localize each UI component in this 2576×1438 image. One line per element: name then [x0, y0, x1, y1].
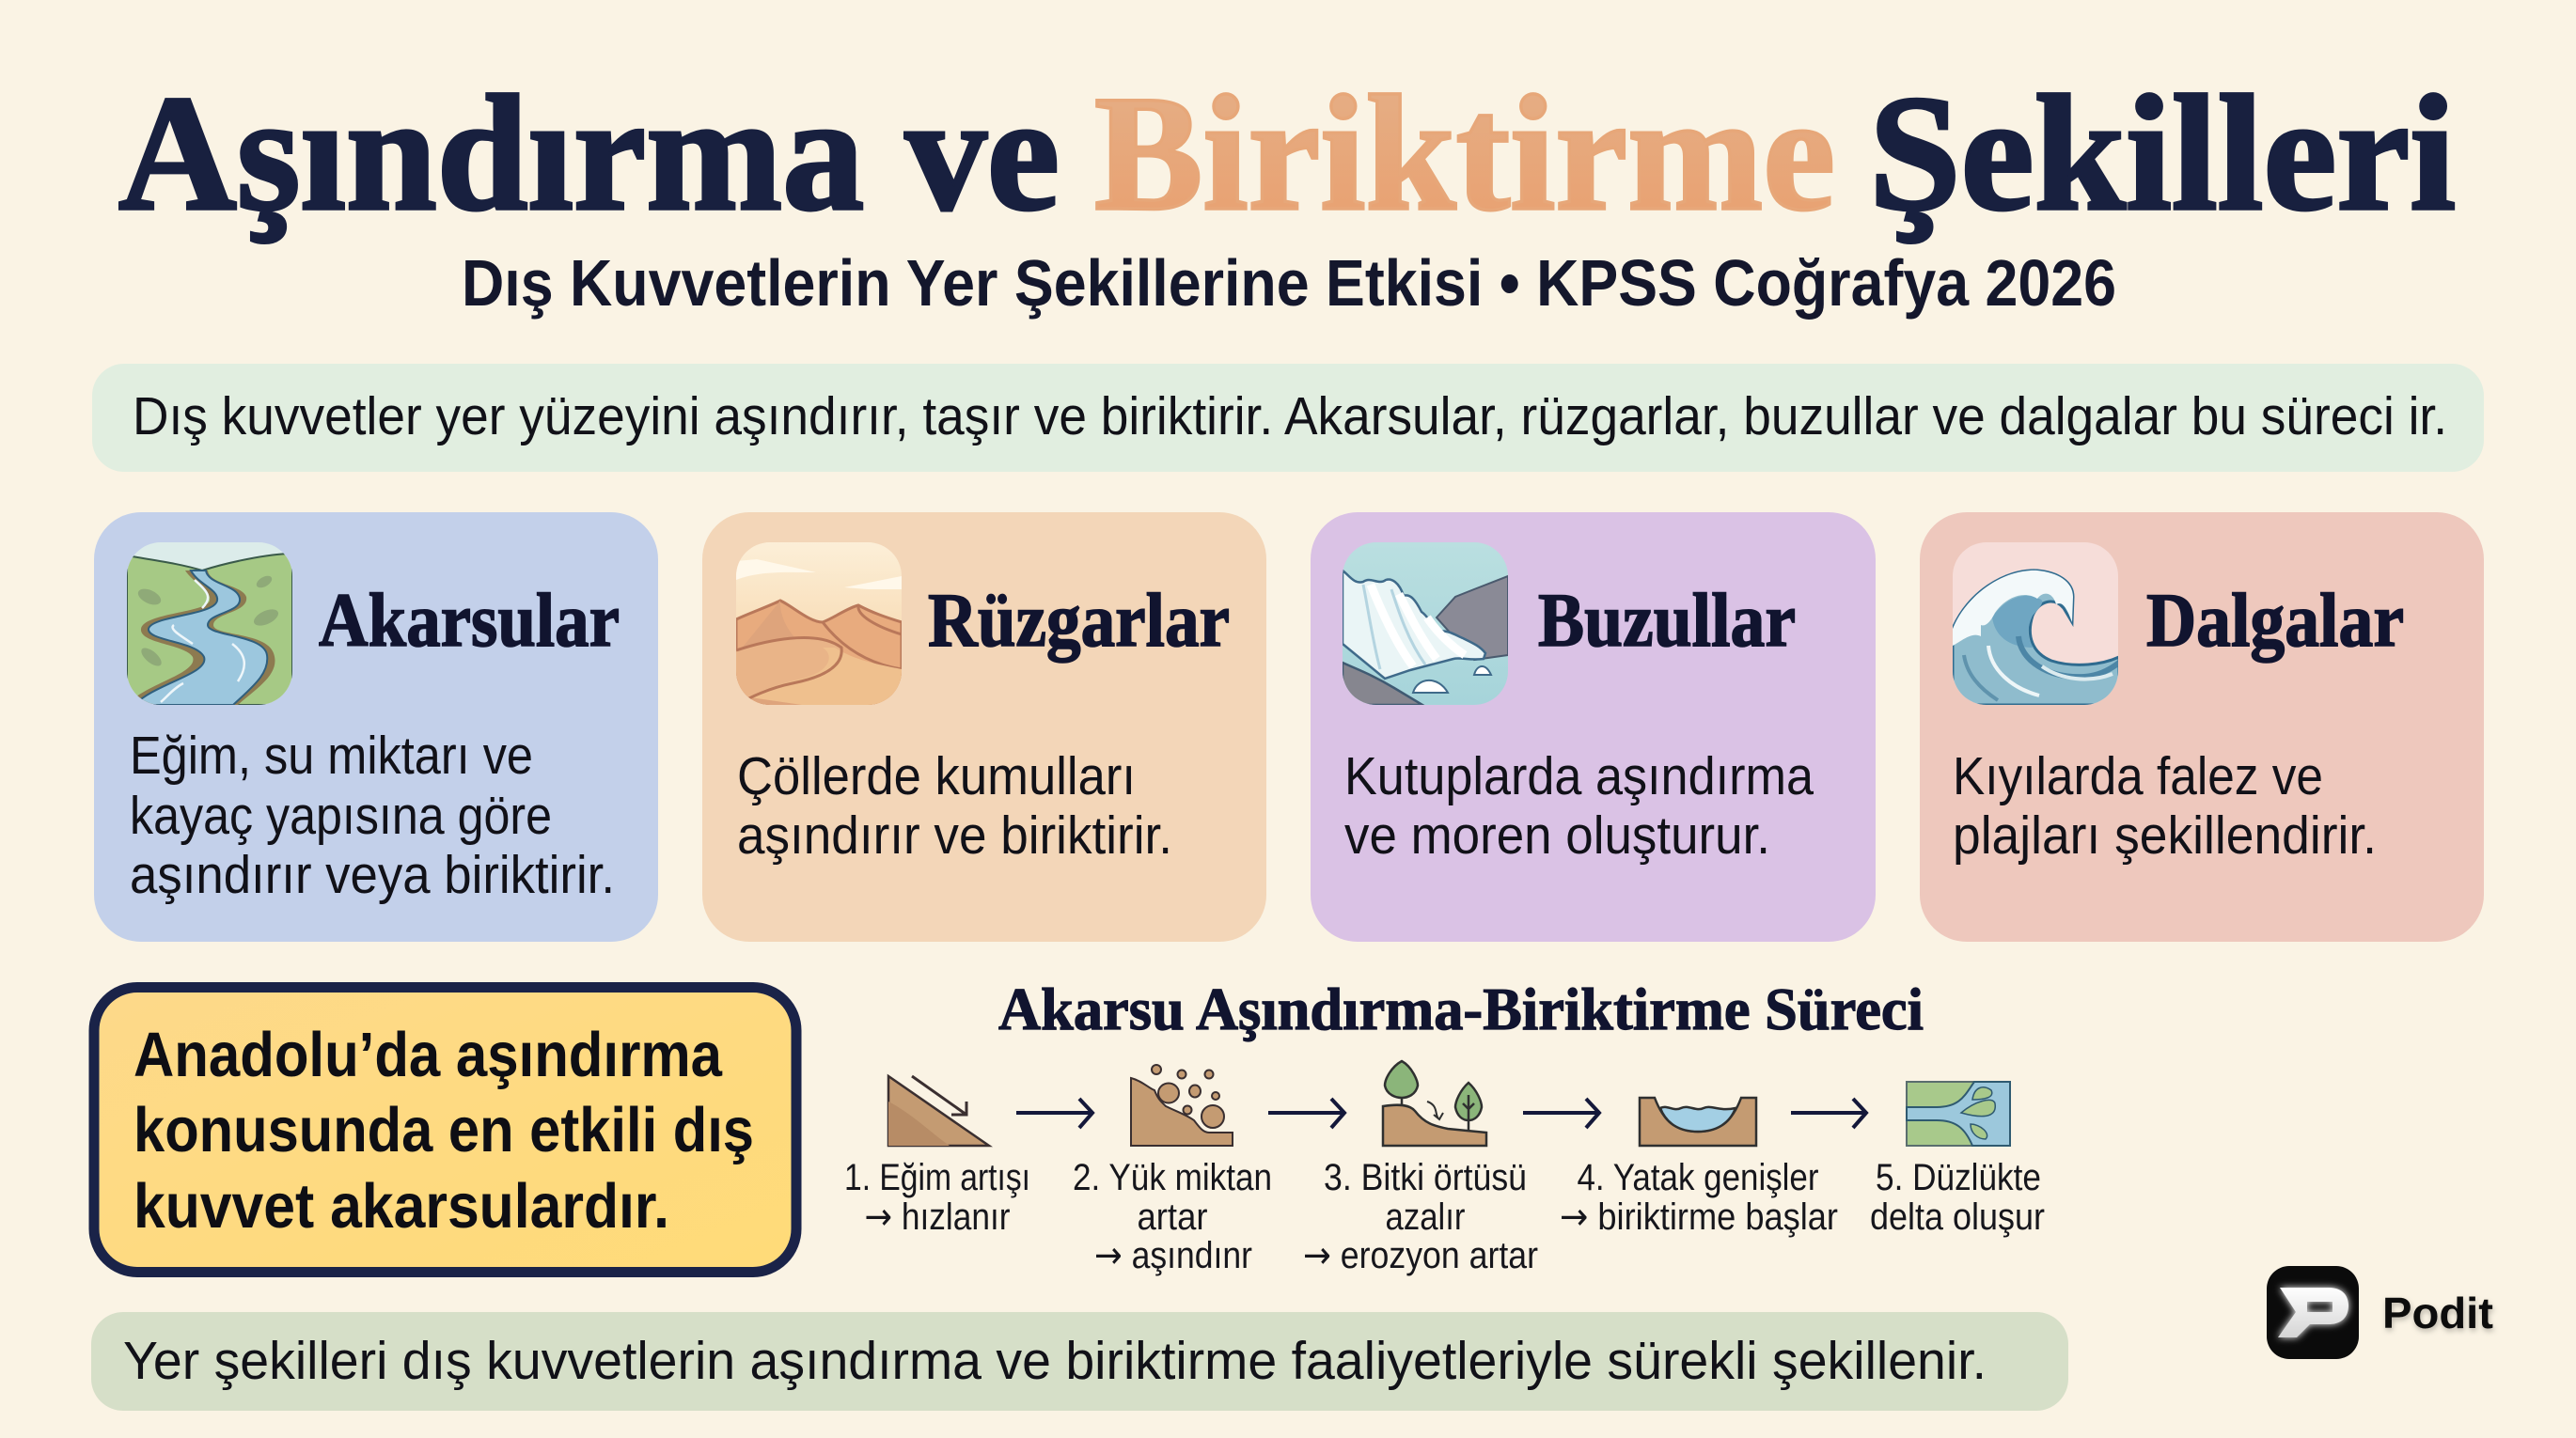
- arrow 3: [1523, 1099, 1599, 1128]
- callout text: konusunda en etkili dış: [134, 1095, 754, 1165]
- description: Akarsular: [130, 726, 615, 905]
- description: Buzullar: Kutuplarda aşındırma: [1344, 746, 1814, 806]
- intro banner: [92, 364, 2484, 472]
- panel: Dalgalar: [1920, 512, 2484, 942]
- description: Dalgalar: Kıyılarda falez ve: [1953, 746, 2323, 806]
- icon: vegetation: [1383, 1061, 1486, 1146]
- conclusion text: Yer şekilleri dış kuvvetlerin aşındırma ve biriktirme faaliyetleriyle sürekli şekillenir.: [123, 1331, 1987, 1391]
- description: Akarsular: aşındırır veya biriktirir.: [130, 845, 615, 905]
- icon: delta: [1907, 1082, 2010, 1146]
- arrow 1: [1016, 1099, 1092, 1128]
- panel: Rüzgarlar: [702, 512, 1266, 942]
- callout: [94, 987, 796, 1273]
- callout text: kuvvet akarsulardır.: [134, 1171, 669, 1242]
- heading: Dalgalar: Dalgalar: [2146, 577, 2404, 663]
- panel: Buzullar: [1311, 512, 1876, 942]
- description: Buzullar: ve moren oluşturur.: [1344, 805, 1770, 866]
- heading: Buzullar: Buzullar: [1538, 577, 1796, 663]
- label 5: [1870, 1157, 2045, 1238]
- label 3: → erozyon artar: [1303, 1234, 1538, 1277]
- description: Rüzgarlar: Çöllerde kumulları: [737, 746, 1136, 806]
- description: Dalgalar: plajları şekillendirir.: [1953, 805, 2377, 866]
- process step 5: [1870, 1082, 2045, 1238]
- title: Aşındırma ve: [118, 62, 1060, 245]
- description: Rüzgarlar: aşındırır ve biriktirir.: [737, 805, 1172, 866]
- label 5: delta oluşur: [1870, 1196, 2045, 1238]
- title: Biriktirme: [1094, 62, 1835, 245]
- title: Şekilleri: [1869, 62, 2456, 245]
- logo mark: [2267, 1266, 2359, 1359]
- label 5: 5. Düzlükte: [1876, 1157, 2041, 1198]
- label 1: 1. Eğim artışı: [844, 1157, 1030, 1198]
- process step 3: [1303, 1061, 1538, 1277]
- process heading: Akarsu Aşındırma-Biriktirme Süreci: [998, 977, 1924, 1042]
- logo: Podit: [2267, 1266, 2493, 1359]
- label 2: artar: [1138, 1196, 1207, 1238]
- label 2: [1073, 1157, 1272, 1277]
- label 3: azalır: [1386, 1196, 1465, 1238]
- conclusion banner: [91, 1312, 2068, 1411]
- process step 2: [1073, 1065, 1272, 1277]
- icon: debris: [1131, 1065, 1233, 1146]
- icon: desert dunes: [736, 542, 902, 705]
- title: [118, 62, 2456, 245]
- description: Dalgalar: [1953, 746, 2377, 866]
- process step 1: [844, 1076, 1030, 1239]
- icon: river bed: [1640, 1098, 1756, 1146]
- icon: wave: [1953, 542, 2119, 705]
- description: Akarsular: Eğim, su miktarı ve: [130, 726, 533, 786]
- description: Akarsular: kayaç yapısına göre: [130, 786, 552, 846]
- arrow 2: [1268, 1099, 1344, 1128]
- label 4: → biriktirme başlar: [1560, 1196, 1838, 1239]
- label 1: → hızlanır: [865, 1196, 1010, 1239]
- intro text: Dış kuvvetler yer yüzeyini aşındırır, taşır ve biriktirir. Akarsular, rüzgarlar, buzullar ve dalgalar bu süreci ir.: [133, 386, 2447, 446]
- description: Buzullar: [1344, 746, 1814, 866]
- label 4: [1560, 1157, 1838, 1239]
- arrow 4: [1791, 1099, 1866, 1128]
- label 2: → aşındınr: [1094, 1234, 1252, 1277]
- heading: Rüzgarlar: Rüzgarlar: [928, 577, 1230, 663]
- icon: river: [127, 542, 292, 705]
- callout text: [134, 1020, 754, 1242]
- logo wordmark: Podit: [2382, 1289, 2493, 1337]
- label 1: [844, 1157, 1030, 1239]
- label 3: [1303, 1157, 1538, 1277]
- icon: glacier: [1343, 542, 1508, 705]
- label 4: 4. Yatak genişler: [1578, 1157, 1818, 1198]
- callout text: Anadolu’da aşındırma: [134, 1020, 723, 1090]
- heading: Akarsular: Akarsular: [319, 577, 620, 663]
- label 2: 2. Yük miktan: [1073, 1157, 1272, 1198]
- label 3: 3. Bitki örtüsü: [1324, 1157, 1527, 1198]
- subtitle: Dış Kuvvetlerin Yer Şekillerine Etkisi • KPSS Coğrafya 2026: [462, 246, 2116, 320]
- description: Rüzgarlar: [737, 746, 1172, 866]
- icon: slope: [888, 1076, 989, 1146]
- panel: Akarsular: [94, 512, 658, 942]
- process step 4: [1560, 1098, 1838, 1239]
